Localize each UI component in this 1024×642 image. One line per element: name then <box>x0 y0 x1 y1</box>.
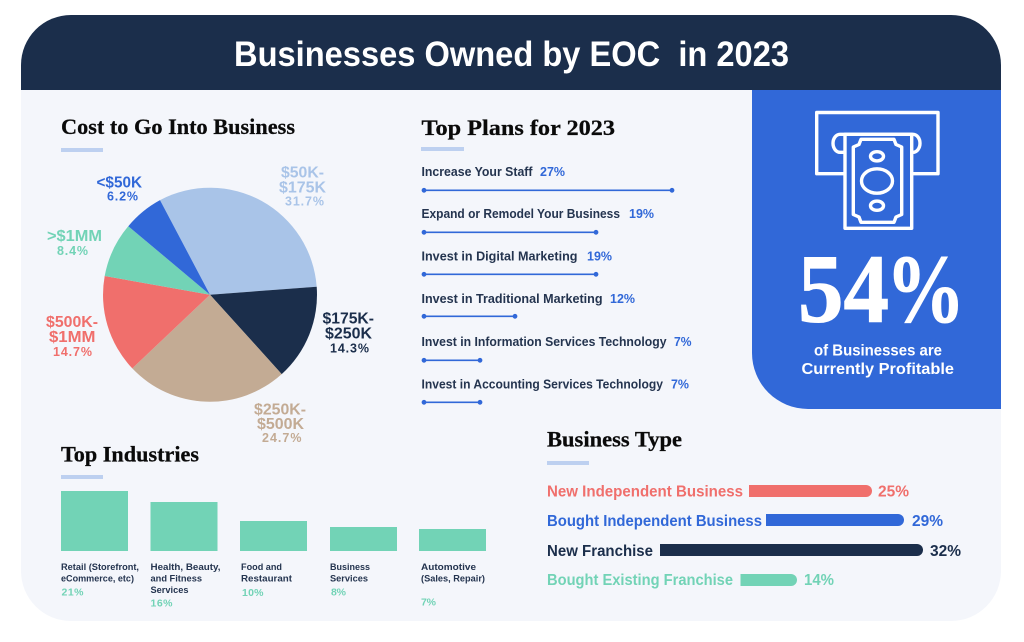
plan: expand or remodel <box>422 206 654 235</box>
plan: traditional marketing <box>422 291 635 319</box>
heading: cost to go into business <box>61 114 295 152</box>
pie label: $175K-$250K <box>322 310 374 356</box>
industry: health, beauty, fitness: Health, Beauty, <box>150 562 221 573</box>
pie label: $175K-$250K: $250K <box>325 325 372 342</box>
row: new franchise: 32% <box>930 543 961 560</box>
heading: business type <box>547 427 682 465</box>
plan: increase your staff <box>422 164 674 193</box>
industry: retail: 21% <box>62 587 84 599</box>
pie label: $500K-$1MM: $500K- <box>46 314 98 331</box>
row: new independent business: New Independent Business <box>547 484 743 501</box>
pie label: $50K-$175K: 31.7% <box>285 195 324 209</box>
plan: increase your staff: 27% <box>540 164 565 179</box>
heading: business type: Business Type <box>547 427 682 452</box>
industry: retail: Retail (Storefront, <box>61 562 139 573</box>
pie label: $175K-$250K: 14.3% <box>330 342 369 356</box>
plan: information services technology: 7% <box>674 334 692 349</box>
plan: traditional marketing: Invest in Traditional Marketing <box>422 291 603 306</box>
plan: information services technology: Invest in Information Services Technology <box>422 334 667 349</box>
industry: automotive: 7% <box>421 597 437 609</box>
panel: top industries <box>61 442 486 610</box>
panel: business type <box>547 427 961 589</box>
row: bought existing franchise: 14% <box>804 572 834 589</box>
title: Businesses Owned by EOC in 2023 <box>234 35 789 74</box>
pie chart <box>103 188 317 402</box>
industry: business services: Services <box>330 573 368 584</box>
plan: traditional marketing: 12% <box>610 291 635 306</box>
industry: automotive: Automotive <box>421 562 476 573</box>
plan: accounting services technology: 7% <box>671 377 689 392</box>
pie label: under $50K: 6.2% <box>107 190 138 204</box>
industry: health, beauty, fitness: 16% <box>150 598 173 610</box>
industry: food and restaurant: Food and <box>241 562 282 573</box>
industry: business services <box>330 527 397 599</box>
callout text: of Businesses are <box>814 342 942 359</box>
pie label: $250K-$500K <box>254 401 306 445</box>
row: bought independent business: 29% <box>912 513 943 530</box>
industry: food and restaurant: Restaurant <box>241 573 293 584</box>
big number: 54%: 54 <box>798 236 889 343</box>
industry: health, beauty, fitness <box>150 502 221 610</box>
pie label: $250K-$500K: $250K- <box>254 401 306 418</box>
row: bought existing franchise: Bought Existing Franchise <box>547 572 733 589</box>
pie label: $500K-$1MM <box>46 314 98 359</box>
callout background <box>752 90 1001 409</box>
industry: retail: eCommerce, etc) <box>61 573 134 584</box>
header banner <box>21 15 1001 90</box>
row: new independent business: 25% <box>878 484 909 501</box>
pie label: over $1MM: 8.4% <box>57 244 88 258</box>
callout text: Currently Profitable <box>802 361 954 378</box>
industry: health, beauty, fitness: and Fitness <box>150 573 202 584</box>
pie label: $250K-$500K: 24.7% <box>262 431 302 445</box>
pie label: over $1MM: >$1MM <box>47 228 102 245</box>
row: new independent business <box>547 484 909 501</box>
industry: automotive <box>419 529 486 609</box>
big number: 54%: % <box>886 236 965 343</box>
industry: food and restaurant <box>240 521 307 599</box>
pie label: $50K-$175K <box>279 165 326 209</box>
row: bought independent business: Bought Independent Business <box>547 513 762 530</box>
pie label: $175K-$250K: $175K- <box>322 310 374 327</box>
plan: digital marketing <box>422 249 612 277</box>
industry: business services: Business <box>330 562 370 573</box>
card background <box>21 90 1001 621</box>
heading: top plans <box>421 115 615 151</box>
heading: top industries <box>61 442 199 479</box>
industry: food and restaurant: 10% <box>242 587 264 599</box>
industry: retail <box>61 491 139 599</box>
pie label: under $50K <box>96 174 142 204</box>
callout text <box>802 342 954 378</box>
heading: top industries: Top Industries <box>61 442 199 467</box>
industry: health, beauty, fitness: Services <box>150 585 188 596</box>
row: new franchise <box>547 543 961 560</box>
industry: business services: 8% <box>331 587 347 599</box>
plan: increase your staff: Increase Your Staff <box>422 164 533 179</box>
pie label: under $50K: <$50K <box>96 174 142 191</box>
plan: accounting services technology: Invest in Accounting Services Technology <box>422 377 664 392</box>
icon: cash from ATM <box>817 112 938 228</box>
big number: 54% <box>798 236 965 343</box>
pie label: $500K-$1MM: 14.7% <box>53 345 92 359</box>
industry: automotive: (Sales, Repair) <box>421 573 485 584</box>
plan: digital marketing: 19% <box>587 249 612 264</box>
plan: accounting services technology <box>422 377 689 405</box>
pie label: $250K-$500K: $500K <box>257 416 304 433</box>
pie label: $500K-$1MM: $1MM <box>49 329 96 346</box>
pie label: $50K-$175K: $175K <box>279 180 326 197</box>
row: bought existing franchise <box>547 572 834 589</box>
plan: expand or remodel: Expand or Remodel Your Business <box>422 206 620 221</box>
heading: cost to go into business: Cost to Go Into Business <box>61 114 295 139</box>
row: bought independent business <box>547 513 943 530</box>
plan: digital marketing: Invest in Digital Marketing <box>422 249 578 264</box>
panel: profitable callout <box>752 90 1001 409</box>
plan: expand or remodel: 19% <box>629 206 654 221</box>
pie label: over $1MM <box>47 228 102 258</box>
panel: top plans for 2023 <box>421 115 692 405</box>
heading: top plans: Top Plans for 2023 <box>422 115 615 140</box>
pie label: $50K-$175K: $50K- <box>281 165 324 182</box>
plan: information services technology <box>422 334 692 363</box>
panel: cost to go into business <box>46 114 374 445</box>
row: new franchise: New Franchise <box>547 543 653 560</box>
